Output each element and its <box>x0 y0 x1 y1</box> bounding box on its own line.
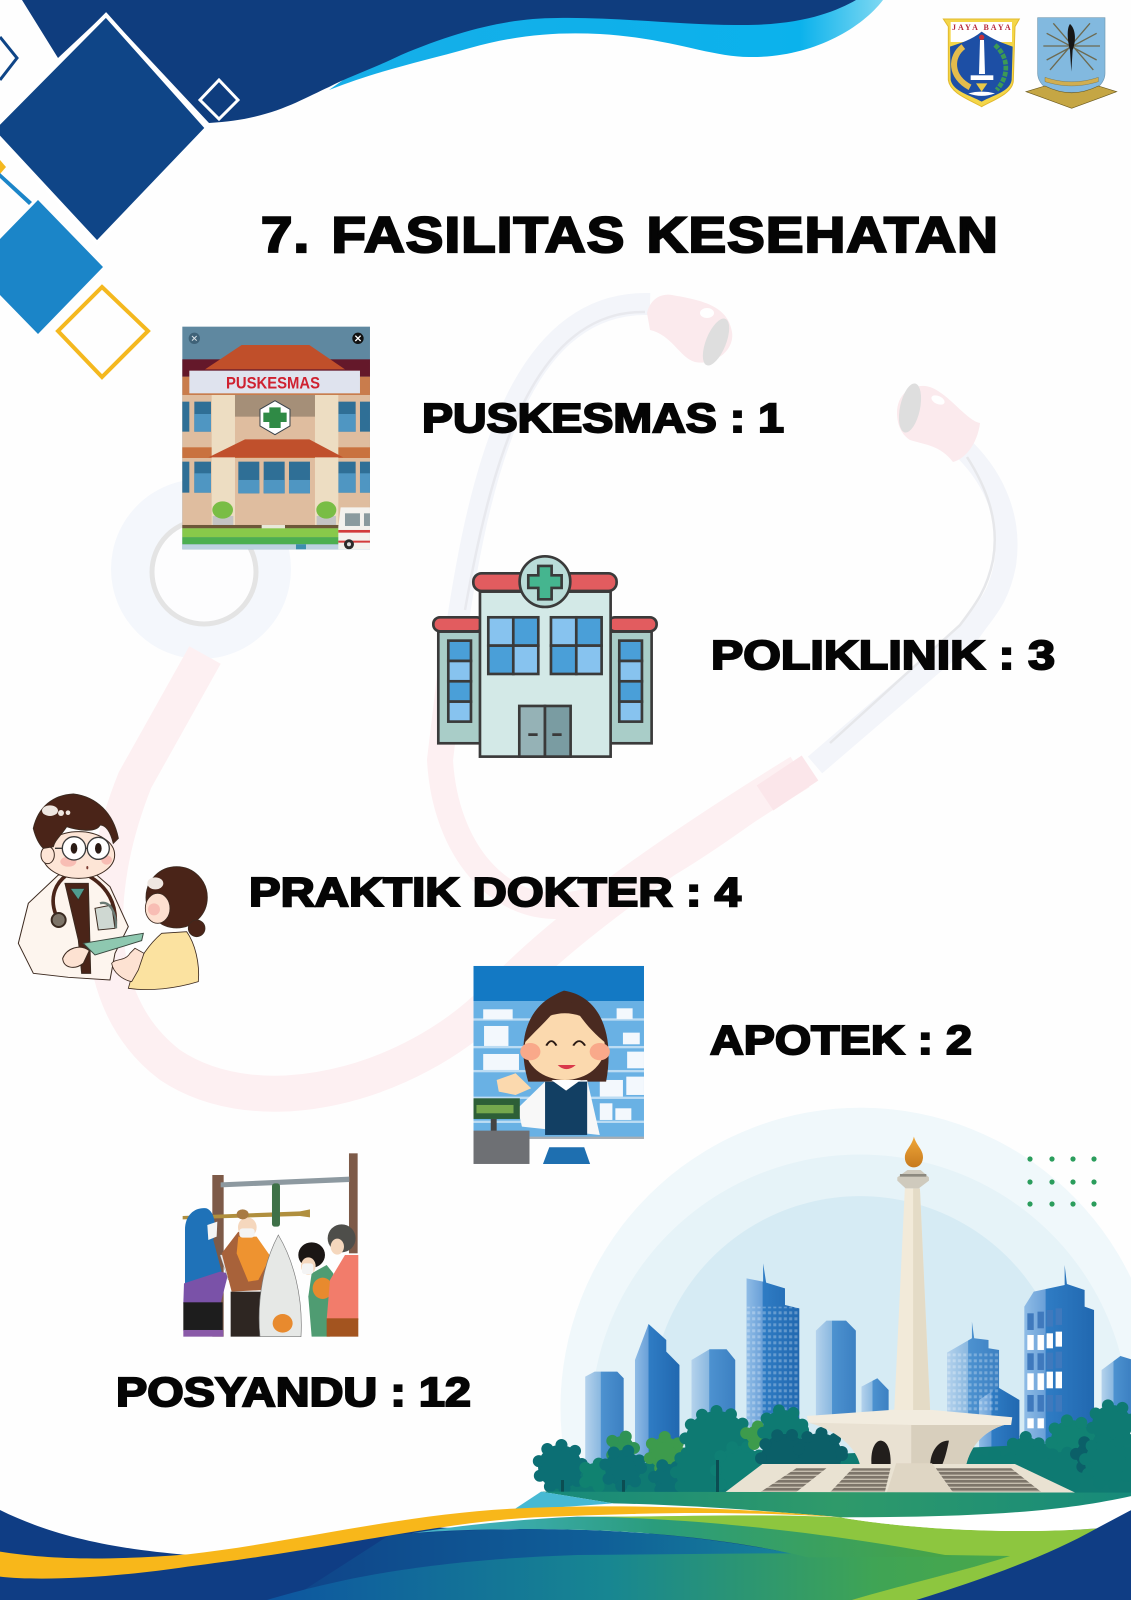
dark blue wave <box>22 0 856 123</box>
inner pink tube <box>440 660 808 906</box>
shelves <box>474 1008 644 1123</box>
monument top platform <box>897 1170 929 1188</box>
label: apotek: APOTEK : 2 <box>710 1017 972 1063</box>
emblem <box>260 401 290 435</box>
big navy diamond <box>0 15 207 243</box>
door <box>519 706 571 757</box>
patient <box>112 867 207 990</box>
white band <box>841 1496 1131 1531</box>
title: 7. FASILITAS KESEHATAN <box>261 207 999 263</box>
upper windows <box>488 617 602 674</box>
frame <box>183 1153 358 1337</box>
sky circles <box>560 1108 1131 1490</box>
doctor <box>18 794 128 980</box>
wing windows <box>448 641 642 722</box>
stethoscope chest piece <box>111 479 291 659</box>
woman in pink <box>327 1224 358 1337</box>
tree trunks <box>561 1460 719 1493</box>
small outlined diamond <box>200 80 238 119</box>
left small chevron <box>0 37 17 80</box>
deep hill <box>267 1553 1025 1600</box>
woman in blue hijab <box>183 1208 247 1337</box>
green ground <box>541 1492 1131 1517</box>
plants <box>212 501 336 527</box>
ambulance <box>338 507 370 549</box>
cash register <box>474 1098 529 1164</box>
trees <box>538 1405 1131 1496</box>
tray <box>543 1147 590 1164</box>
icon: doctor and patient <box>18 794 207 990</box>
light blue wave <box>329 0 883 90</box>
monument shaft <box>894 1188 930 1410</box>
stethoscope watermark <box>105 295 1007 1094</box>
left binaural tube <box>452 304 650 660</box>
main pink tube <box>105 655 800 1094</box>
sign text: PUSKESMAS <box>226 373 320 392</box>
doctor hand <box>63 947 89 967</box>
woman <box>497 991 610 1135</box>
blue diamond <box>0 200 103 334</box>
bottom wave <box>0 1492 1131 1600</box>
label: praktik dokter: PRAKTIK DOKTER : 4 <box>249 869 741 915</box>
close buttons <box>189 333 364 344</box>
clipboard <box>83 933 143 955</box>
gold outlined diamond <box>58 287 148 377</box>
teal band <box>411 1517 952 1557</box>
metal junction <box>765 768 810 798</box>
right navy corner <box>902 1510 1131 1600</box>
icon: pharmacist <box>474 966 644 1164</box>
city scene <box>538 1108 1131 1496</box>
icon: poliklinik building <box>433 556 657 757</box>
right ear tip <box>895 381 980 462</box>
gold fragment <box>0 160 6 174</box>
baby sling <box>259 1235 301 1337</box>
logo: Jakarta coat of arms <box>943 19 1019 107</box>
glasses <box>55 837 112 869</box>
woman in orange scarf <box>222 1209 271 1337</box>
left ear tip <box>647 295 735 369</box>
panel: puskesmas picture <box>182 327 370 549</box>
logo: municipal emblem <box>1026 18 1117 108</box>
monument <box>725 1137 1075 1493</box>
light blue wedge <box>512 1492 613 1511</box>
light green band <box>592 1515 1097 1600</box>
monument cup <box>807 1408 1012 1467</box>
monument flame <box>905 1137 923 1167</box>
logo motto: JAYA BAYA <box>952 23 1011 32</box>
right binaural tube <box>815 450 1007 765</box>
tower windows <box>1027 1332 1062 1428</box>
top wave <box>22 0 883 123</box>
label: poliklinik: POLIKLINIK : 3 <box>711 632 1055 678</box>
geometric diamonds <box>0 15 238 377</box>
skyline buildings <box>585 1263 1131 1473</box>
monument base stairs <box>725 1463 1075 1493</box>
label: posyandu: POSYANDU : 12 <box>116 1369 471 1415</box>
navy base <box>0 1510 1010 1600</box>
icon: posyandu weighing <box>183 1153 358 1337</box>
thin blue line <box>0 173 32 205</box>
yellow ribbon <box>0 1506 844 1579</box>
label: puskesmas: PUSKESMAS : 1 <box>422 395 784 441</box>
mid blue hill <box>289 1529 808 1600</box>
dots <box>1027 1156 1097 1207</box>
girl in green <box>298 1242 333 1337</box>
